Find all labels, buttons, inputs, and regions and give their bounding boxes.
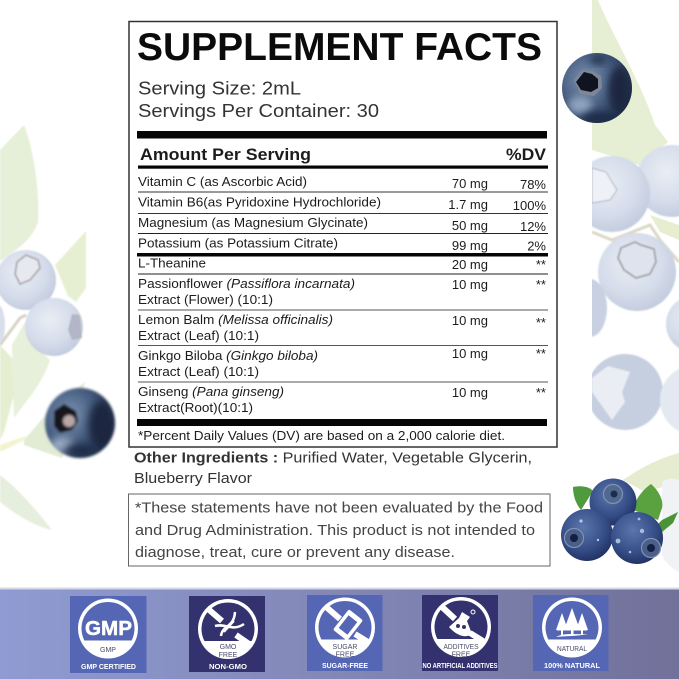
callout: FDA disclaimer: *These statements have not been evaluated by the Food [135,500,543,516]
berry: right middle [666,300,679,349]
berry: pale sliver [0,305,5,345]
badge: no artificial additives: NO ARTIFICIAL ADDITIVES [422,661,498,670]
badge: no artificial additives: FREE [452,652,471,658]
badge: no artificial additives [422,595,498,671]
row: magnesium [138,216,546,234]
row: passionflower [138,277,546,307]
badge: GMP certified [70,596,146,673]
row: vitamin B6: Vitamin B6(as Pyridoxine Hydrochloride) [138,196,381,210]
servings per container: Servings Per Container: 30 [138,101,379,121]
row: ginseng: ** [536,385,546,400]
row: ginseng [138,385,546,415]
badge: 100% natural: 100% NATURAL [544,661,600,670]
badge: non-GMO: FREE [219,652,238,659]
icon: crossed sugar packet [325,606,368,642]
row: ginkgo biloba: Extract (Leaf) (10:1) [138,365,259,379]
callout: FDA disclaimer: diagnose, treat, cure or prevent any disease. [135,544,455,561]
text block: other ingredients: Blueberry Flavor [134,471,252,487]
row: passionflower: Extract (Flower) (10:1) [138,293,273,307]
berry: lower left [587,354,663,430]
row: ginkgo biloba: Ginkgo Biloba (Ginkgo biloba) [138,349,318,363]
row: potassium: Potassium (as Potassium Citrate) [138,236,338,250]
badge: sugar-free: FREE [336,652,355,658]
icon: blueberry bouquet [561,478,678,564]
badge: sugar-free [307,595,382,671]
row: lemon balm: 10 mg [452,313,488,328]
leaf: right [657,512,678,532]
berry: centre [598,233,676,311]
panel: supplement facts [129,22,557,447]
row: ginseng: Ginseng (Pana ginseng) [138,385,284,399]
right botanical decoration [592,0,679,432]
panel: certification band [0,588,679,679]
leaf: bottom left [0,475,52,530]
serving size: Serving Size: 2mL [138,78,301,98]
leaf: pale green under berries [650,215,679,240]
leaf: top right [592,0,668,165]
badge: GMP certified: GMP CERTIFIED [81,662,137,671]
row: magnesium: 50 mg [452,218,488,233]
leaf: upper left [0,125,38,262]
icon: crossed flask [441,606,483,641]
row: potassium [138,236,546,254]
row: potassium: 2% [527,238,546,254]
row: ginkgo biloba: ** [536,346,546,361]
leaf: left [573,486,593,510]
row: passionflower: Passionflower (Passiflora incarnata) [138,277,355,291]
berry: upper left [592,156,650,232]
row: vitamin C: Vitamin C (as Ascorbic Acid) [138,175,307,189]
stem: left [0,436,26,452]
row: vitamin C: 70 mg [452,176,488,191]
row: vitamin C [138,175,546,192]
table header: Amount Per Serving [140,145,311,164]
row: L-theanine: 20 mg [452,257,488,272]
berry: pale upper [0,250,56,310]
footnote: *Percent Daily Values (DV) are based on a 2,000 calorie diet. [138,429,505,443]
row: passionflower: ** [536,277,546,292]
callout: FDA disclaimer: and Drug Administration. This product is not intended to [135,522,535,539]
thick rule [137,131,547,138]
stem: pale [0,315,26,345]
row: vitamin B6 [138,196,546,213]
row: lemon balm: ** [536,315,546,330]
row: ginseng: Extract(Root)(10:1) [138,401,253,415]
table header [140,145,547,164]
row: vitamin B6: 1.7 mg [448,197,488,212]
pale berries [592,144,679,432]
berry: sliver [592,278,608,338]
row: L-theanine [138,256,546,272]
leaf: lower left [12,322,50,418]
row: ginseng: 10 mg [452,385,488,400]
text block: other ingredients [134,450,532,487]
leaf: middle left [55,231,86,302]
row: magnesium: 12% [520,219,546,234]
berry: right [611,512,663,564]
row: ginkgo biloba: 10 mg [452,346,488,361]
row: L-theanine: L-Theanine [138,256,206,270]
row: L-theanine: ** [536,257,546,272]
icon: dark blueberry top right [562,53,632,124]
row: magnesium: Magnesium (as Magnesium Glycinate) [138,216,368,230]
stem: right [592,225,679,262]
badge: no artificial additives: ADDITIVES [444,644,479,651]
icon: pine trees [556,608,588,637]
leaf: behind dark berry [24,382,85,458]
berry: lower right [660,365,679,435]
row: lemon balm [138,313,546,343]
icon: dark blueberry left [45,388,116,458]
row: vitamin C: 78% [520,177,546,192]
title: SUPPLEMENT FACTS [137,26,542,69]
leaf: far left [0,345,14,440]
badge: sugar-free: SUGAR-FREE [322,661,368,670]
table header: %DV [506,145,547,164]
berry: upper right [636,145,679,217]
row: lemon balm: Extract (Leaf) (10:1) [138,329,259,343]
berry: left [561,509,613,561]
row: potassium: 99 mg [452,238,488,253]
icon: milk splash behind bouquet [662,479,679,572]
badge: non-GMO: GMO [220,644,237,651]
badge: 100% natural: NATURAL [557,646,587,653]
badge: GMP certified: GMP [100,647,116,654]
text block: other ingredients: Other Ingredients : Purified Water, Vegetable Glycerin, [134,450,532,466]
berry crown: upper left [592,168,617,203]
row: lemon balm: Lemon Balm (Melissa officinalis) [138,313,333,327]
row: passionflower: 10 mg [452,277,488,292]
icon: pale leaf lower right [623,453,679,492]
row: vitamin B6: 100% [513,198,546,213]
berry crown details [15,255,40,284]
badge: non-GMO: NON-GMO [209,662,247,671]
left botanical decoration [0,125,86,530]
leaf: centre [633,484,662,520]
icon: crossed DNA [207,608,249,644]
badge: 100% natural [533,595,608,671]
berry crown: centre [618,242,656,278]
badge: GMP certified: GMP [85,617,132,640]
berry: top [590,478,636,526]
berry highlight: lower left [592,366,630,420]
row: ginkgo biloba [138,346,546,379]
badge: non-GMO [189,596,265,672]
callout: FDA disclaimer [128,494,550,566]
badge: sugar-free: SUGAR [333,644,357,651]
berry: pale lower [25,298,83,356]
